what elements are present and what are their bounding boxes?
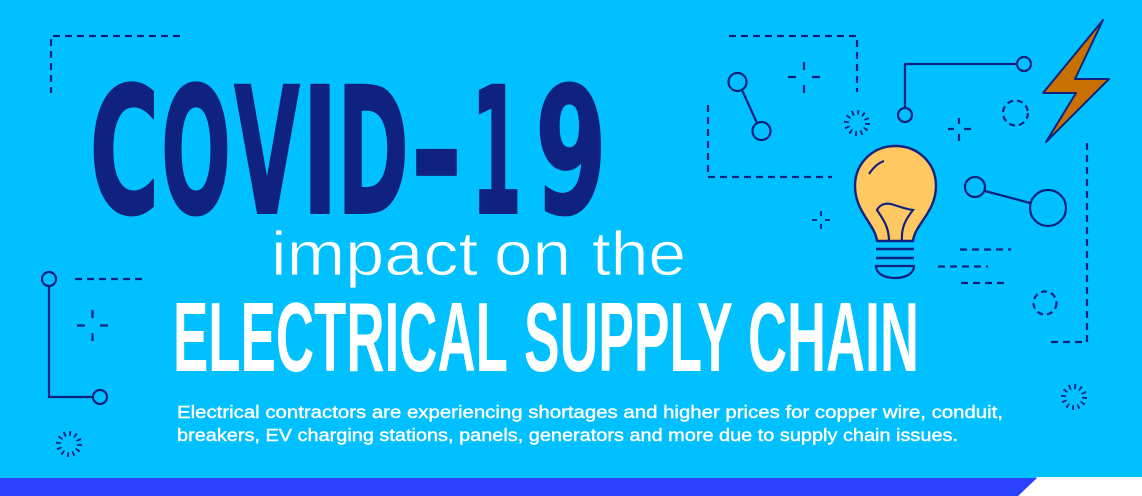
title: COVID-19: C	[90, 50, 160, 255]
icon: dashed circle upper	[1003, 100, 1028, 126]
title: COVID-19: -	[410, 50, 463, 255]
icon: small dumbbell connector	[728, 73, 770, 140]
title: COVID-19: 1	[471, 50, 522, 255]
dashed line: left	[75, 278, 142, 280]
icon: sparkle cross near bolt	[948, 118, 971, 141]
subtitle: impact on the: the	[592, 220, 686, 289]
title: COVID-19: O	[161, 50, 231, 255]
icon: upper sparkle cross	[788, 62, 820, 93]
bottom bar	[0, 477, 1142, 496]
dashed corner: middle left	[708, 105, 832, 177]
description text: breakers, EV charging stations, panels, generators and more due to supply chain issues.	[177, 425, 958, 445]
title: COVID-19: 9	[535, 50, 607, 255]
title: COVID-19: I	[302, 50, 338, 255]
icon: large dumbbell connector	[965, 177, 1066, 226]
dashed lines: near bulb	[938, 250, 1011, 283]
icon: left burst	[58, 434, 80, 454]
icon: left sparkle cross	[77, 310, 108, 341]
description text: Electrical contractors are experiencing shortages and higher prices for copper wire, conduit,	[177, 402, 1003, 422]
dashed corner: top left	[51, 36, 180, 93]
subtitle: impact on the: impact	[271, 220, 478, 289]
icon: lightning bolt	[1043, 20, 1109, 142]
icon: upper burst	[846, 112, 868, 134]
dashed corner: right	[1046, 143, 1087, 342]
subtitle: impact on the: on	[494, 220, 571, 289]
icon: lower right burst	[1064, 386, 1084, 408]
title: Electrical Supply Chain: SUPPLY	[524, 282, 732, 392]
title: Electrical Supply Chain: ELECTRICAL	[173, 282, 507, 392]
dashed corner: upper right	[729, 36, 857, 92]
description text	[177, 402, 1003, 445]
title: COVID-19: D	[337, 50, 409, 255]
icon: dashed circle lower	[1034, 292, 1056, 314]
icon: light bulb	[855, 146, 936, 278]
title: COVID-19: V	[234, 50, 300, 255]
icon: L connector	[898, 57, 1031, 122]
title: Electrical Supply Chain: CHAIN	[748, 282, 919, 392]
icon: left connector	[42, 272, 107, 404]
icon: small sparkle cross	[812, 211, 830, 229]
